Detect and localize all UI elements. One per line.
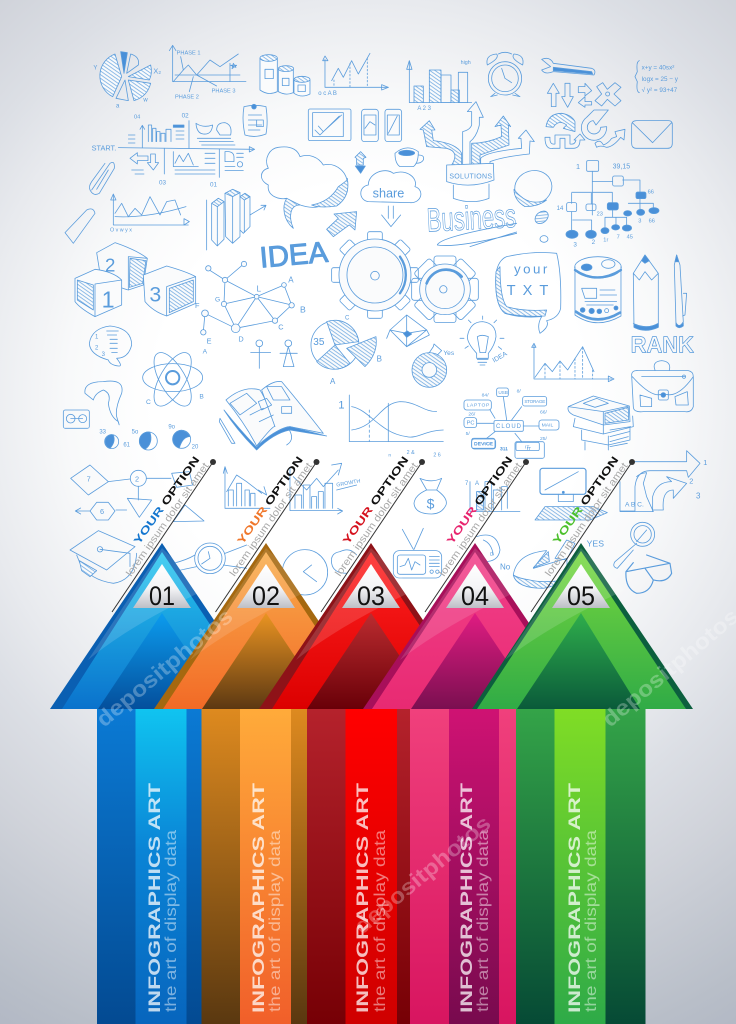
icon: small top boxes: IT xyxy=(527,446,531,452)
number plate 01: 01 xyxy=(149,581,175,611)
column 1 title: INFOGRAPHICS ART xyxy=(145,782,164,1013)
chart: cloud devices diagram: 25/ xyxy=(540,436,548,442)
chart: start timeline: 01 xyxy=(210,182,218,189)
chart: phases line chart: PHASE 3 xyxy=(212,89,236,95)
column 4 xyxy=(410,709,516,1024)
chart: organisation flow chart: 1 xyxy=(576,162,580,171)
chart: cloud devices diagram xyxy=(464,388,559,452)
icon: atom: A xyxy=(203,348,208,355)
watermark: stock photo text: depositphotos xyxy=(91,603,237,732)
chart: flow diagram: 2 xyxy=(135,475,139,484)
text: IDEA: IDEA xyxy=(258,236,330,275)
icon: coin xyxy=(511,166,556,208)
icon: three small pies: 20 xyxy=(192,444,199,450)
column 3 subtitle: the art of display data xyxy=(372,830,389,1012)
doodles: top left sketches xyxy=(65,45,421,250)
label 1 your option: lorem ipsum dolor sit amet xyxy=(124,461,212,579)
chart: organisation flow chart: 7 xyxy=(617,234,620,240)
doodles: middle right sketches xyxy=(387,253,695,452)
icon: bulb xyxy=(460,316,509,365)
icon: alarm clock xyxy=(487,52,523,97)
chart: start timeline: START. xyxy=(92,144,116,153)
icon: bulb: IDEA xyxy=(491,350,509,364)
column 5 title: INFOGRAPHICS ART xyxy=(565,782,584,1013)
icon: money bag xyxy=(414,478,446,514)
chart: wave chart xyxy=(110,194,189,234)
icon: numbered cubes: 2 xyxy=(105,255,115,276)
icon: three small pies xyxy=(99,424,199,450)
icon: share cloud: share xyxy=(373,187,404,201)
doodles: lower right sketches xyxy=(388,438,707,593)
triangle 3 red xyxy=(259,543,483,709)
doodles: top right sketches xyxy=(395,52,679,249)
chart: wave chart: O v w y x xyxy=(110,228,132,234)
column 2 subtitle: the art of display data xyxy=(267,830,284,1012)
icon: network diagram xyxy=(195,261,306,345)
label 4 your option: YOUR OPTION xyxy=(445,454,515,547)
arrow: large right arrow and A B C steps: A B C. xyxy=(625,502,644,509)
triangle 4 pink xyxy=(363,543,587,709)
icon: three small pies: 5o xyxy=(132,429,139,435)
column 1 subtitle: the art of display data xyxy=(163,830,180,1012)
column 2 title: INFOGRAPHICS ART xyxy=(249,782,268,1013)
chart: cloud devices diagram: 311 xyxy=(500,446,508,452)
triangle 5 green xyxy=(472,543,693,709)
icon: numbered cubes xyxy=(75,243,196,317)
column 5 subtitle: the art of display data xyxy=(583,830,600,1012)
number plate 04: 04 xyxy=(461,581,489,611)
chart: rising bars xyxy=(290,463,361,514)
chart: cloud devices diagram: IT xyxy=(525,444,529,450)
column 3 title: INFOGRAPHICS ART xyxy=(353,782,372,1013)
icon: three small pies: 33 xyxy=(99,429,107,435)
icon: magnifier xyxy=(614,522,655,568)
watermark: stock photo text xyxy=(91,603,736,939)
icon: atom xyxy=(143,347,208,412)
chart: bar chart xyxy=(407,60,472,112)
number plate 04 xyxy=(446,564,504,611)
column 1 xyxy=(97,709,202,1024)
chart: falling bars xyxy=(223,467,270,508)
number plate 02: 02 xyxy=(252,581,280,611)
text: formulas: √ y² = 93+47 xyxy=(642,87,678,94)
chart: A B C line chart: o c A B xyxy=(318,91,337,97)
arrow: large right arrow and A B C steps: 3 xyxy=(696,491,701,500)
icon: three small pies: 61 xyxy=(123,443,131,449)
icon: network diagram: G xyxy=(215,297,220,304)
number plate 01 xyxy=(133,564,191,611)
icon: big gear xyxy=(332,232,418,318)
chart: cloud devices diagram: CLOUD xyxy=(496,424,522,430)
chart: pie with exploded slice: A xyxy=(330,377,336,386)
icon: your text speech bubble: TXT xyxy=(507,283,548,299)
chart: organisation flow chart: 3 xyxy=(573,242,577,249)
chart: pie with exploded slice xyxy=(311,315,382,386)
chart: organisation flow chart: 23 xyxy=(597,212,603,218)
label 3 your option: lorem ipsum dolor sit amet xyxy=(333,461,421,579)
chart: bar chart: A 2 3 xyxy=(417,106,432,112)
icon: large pencil xyxy=(633,255,658,330)
label 1 your option: YOUR OPTION xyxy=(132,454,202,547)
column 4 title: INFOGRAPHICS ART xyxy=(457,782,476,1013)
icon: graduation cap xyxy=(70,531,137,583)
label 5 your option xyxy=(531,454,635,612)
chart: peak line chart xyxy=(532,343,614,382)
icon: envelope xyxy=(632,121,672,148)
chart: A B C line chart xyxy=(318,53,388,97)
icon: your text speech bubble xyxy=(496,253,561,333)
icon: numbered cubes: 1 xyxy=(102,286,115,312)
icon: speech bubble list: 1 xyxy=(95,334,99,340)
chart: organisation flow chart: 14 xyxy=(557,206,564,212)
number plate 03: 03 xyxy=(357,581,385,611)
icon: atom: B xyxy=(199,393,204,400)
icon: network diagram: E xyxy=(207,336,212,345)
chart: A bars chart: 7 xyxy=(465,481,469,487)
icon: paperclip xyxy=(89,162,114,194)
icon: network diagram: L xyxy=(257,285,262,294)
icon: clipboard xyxy=(243,104,267,136)
icon: numbered cubes: 3 xyxy=(149,283,161,307)
icon: small top boxes: 311 xyxy=(500,447,508,453)
icon: solutions box with arrows xyxy=(420,102,534,202)
icon: sketched pie chart: X₂ xyxy=(153,66,161,75)
icon: money bag: $ xyxy=(427,495,435,511)
icon: speech bubble list: 2 xyxy=(95,345,99,351)
chart: organisation flow chart: 3 xyxy=(638,218,641,224)
chart: cloud devices diagram: 84/ xyxy=(482,393,489,399)
icon: small cloud xyxy=(331,550,357,573)
icon: GO box xyxy=(63,410,89,428)
chart: cloud devices diagram: LAPTOP xyxy=(467,403,490,409)
arrow: hatched arrow xyxy=(327,212,357,237)
chart: rising bars: GROWTH xyxy=(336,478,361,489)
icon: network diagram: C xyxy=(278,322,284,331)
chart: organisation flow chart xyxy=(557,161,659,249)
icon: network diagram: B xyxy=(300,305,306,315)
chart: cloud devices diagram: 5/ xyxy=(466,431,470,437)
icon: solutions box with arrows: SOLUTIONS xyxy=(449,173,492,180)
icon: sketched pie chart: a xyxy=(116,103,120,109)
icon: coffee cup xyxy=(395,148,424,167)
chart: cloud devices diagram: PC xyxy=(467,421,475,427)
chart: organisation flow chart: 2 xyxy=(592,239,596,246)
number plate 02 xyxy=(237,564,295,611)
icon: keyboard xyxy=(535,507,607,520)
chart: start timeline xyxy=(92,112,255,189)
icon: unfolded box xyxy=(387,315,429,347)
icon: three small pies: 9o xyxy=(168,424,176,430)
chart: A bars chart: A xyxy=(475,481,479,487)
watermark: stock photo text: depositphotos xyxy=(349,810,495,939)
chart: start timeline: 02 xyxy=(182,112,189,119)
label 5 your option: YOUR OPTION xyxy=(551,454,621,547)
chart: cloud devices diagram: 8/ xyxy=(517,389,521,395)
chart: 3D bars xyxy=(207,189,266,250)
label 4 your option xyxy=(425,454,529,612)
doodles: lower left sketches xyxy=(70,463,361,595)
chart: pie with exploded slice: C xyxy=(345,315,350,321)
triangle 1 blue xyxy=(50,543,274,709)
icon: television xyxy=(393,528,442,578)
number plate 03 xyxy=(342,564,400,611)
icon: arrows set xyxy=(547,83,621,107)
chart: bar chart: high xyxy=(461,60,471,66)
arrow: large right arrow and A B C steps xyxy=(620,451,707,512)
icon: speech bubble list xyxy=(89,326,132,366)
chart: flow diagram: 7 xyxy=(87,475,91,484)
chart: flow diagram: 6 xyxy=(100,507,104,516)
icon: small clock xyxy=(173,543,247,574)
icon: small top boxes: 2 & xyxy=(407,450,415,456)
icon: spiral target with arrow: Yes xyxy=(443,350,455,357)
chart: phases line chart: PHASE 1 xyxy=(177,51,201,57)
text: formulas: x+y = 40sx² xyxy=(642,64,674,71)
icon: tin can xyxy=(575,257,621,323)
column 5 xyxy=(516,709,646,1024)
chart: pie coin: No xyxy=(500,562,511,571)
chart: cloud devices diagram: 26/ xyxy=(468,411,476,417)
column 3 xyxy=(307,709,411,1024)
icon: pen xyxy=(65,209,95,243)
icon: two figures xyxy=(251,340,297,368)
chart: organisation flow chart: 39,15 xyxy=(613,164,630,171)
label 2 your option xyxy=(216,454,320,612)
icon: tablet and phones xyxy=(308,109,402,142)
chart: organisation flow chart: 1r xyxy=(603,238,608,244)
icon: small top boxes xyxy=(388,438,544,459)
chart: curve chart: 1 xyxy=(338,399,345,411)
chart: flow diagram xyxy=(71,465,204,522)
icon: wrench xyxy=(542,58,595,75)
arrow: curved arrows xyxy=(545,110,625,149)
watermark: stock photo text: depositphotos xyxy=(597,603,736,732)
chart: organisation flow chart: 45 xyxy=(627,234,633,240)
chart: pie coin: YES xyxy=(587,539,604,549)
chart: pie with exploded slice: 35 xyxy=(313,337,325,348)
icon: open book xyxy=(219,381,327,450)
chart: cloud devices diagram: DEVICE xyxy=(474,442,494,448)
icon: small top boxes: 2 6 xyxy=(433,453,441,459)
chart: cloud devices diagram: 66/ xyxy=(540,409,548,415)
text: formulas xyxy=(635,61,679,94)
text: Business heading: Business xyxy=(426,198,517,240)
icon: three cylinders xyxy=(260,55,310,96)
icon: stack of books xyxy=(568,396,633,450)
text: RANK: RANK xyxy=(631,331,695,357)
icon: large clock xyxy=(282,550,328,595)
icon: glasses xyxy=(626,555,672,593)
icon: helmet dome: 0 xyxy=(490,552,493,558)
chart: organisation flow chart: 66 xyxy=(648,189,654,195)
column 2 xyxy=(202,709,307,1024)
chart: cloud devices diagram: MAIL xyxy=(542,423,554,429)
arrow: large right arrow and A B C steps: 1 xyxy=(703,458,707,467)
icon: small gear xyxy=(412,256,478,323)
icon: your text speech bubble: your xyxy=(514,261,548,276)
icon: network diagram: F xyxy=(195,301,200,310)
number plate 05: 05 xyxy=(567,581,595,611)
icon: small top boxes: DEVICE xyxy=(474,441,493,447)
label 4 your option: lorem ipsum dolor sit amet xyxy=(437,461,525,579)
doodles: middle left sketches xyxy=(63,232,443,450)
icon: sketched pie chart xyxy=(93,52,161,109)
icon: atom: C xyxy=(146,399,151,406)
chart: cloud devices diagram: USB xyxy=(498,390,508,395)
icon: share cloud xyxy=(361,171,421,227)
icon: pills xyxy=(533,209,551,242)
icon: small top boxes: n xyxy=(388,453,391,459)
number plate 05 xyxy=(552,564,610,611)
icon: sketched pie chart: w xyxy=(142,97,148,103)
icon: network diagram: A xyxy=(288,276,294,285)
label 1 your option xyxy=(112,454,216,612)
icon: big cloud xyxy=(261,147,348,228)
arrow: small double arrow xyxy=(355,152,366,173)
column 4 subtitle: the art of display data xyxy=(475,830,492,1012)
chart: start timeline: 03 xyxy=(159,180,167,187)
chart: pie coin xyxy=(500,539,604,588)
triangle 2 orange xyxy=(154,543,378,709)
label 2 your option: lorem ipsum dolor sit amet xyxy=(228,461,315,579)
chart: pie with exploded slice: B xyxy=(377,355,382,364)
chart: organisation flow chart: 66 xyxy=(649,218,655,224)
label 3 your option: YOUR OPTION xyxy=(341,454,411,547)
chart: cloud devices diagram: STORAGE xyxy=(524,399,545,404)
label 5 your option: lorem ipsum dolor sit amet xyxy=(543,461,631,579)
icon: desktop monitor xyxy=(540,468,586,502)
icon: small pencil xyxy=(674,255,687,328)
icon: hatched question mark xyxy=(85,381,122,425)
icon: spiral target with arrow xyxy=(412,344,455,387)
icon: network diagram: D xyxy=(238,335,244,344)
chart: curve chart xyxy=(338,395,443,442)
text: formulas: logx = 25 − y xyxy=(642,76,679,83)
chart: phases line chart xyxy=(169,45,246,100)
text: Business heading xyxy=(426,198,517,247)
label 2 your option: YOUR OPTION xyxy=(235,454,306,547)
icon: speech bubble list: 3 xyxy=(102,352,106,358)
arrow: large right arrow and A B C steps: 2 xyxy=(689,476,693,485)
chart: phases line chart: PHASE 2 xyxy=(175,94,199,100)
chart: start timeline: 04 xyxy=(134,114,140,120)
chart: A bars chart xyxy=(465,481,520,512)
icon: briefcase xyxy=(632,361,693,412)
icon: helmet dome xyxy=(475,535,500,562)
label 3 your option xyxy=(321,454,425,612)
icon: sketched pie chart: Y xyxy=(93,65,97,71)
